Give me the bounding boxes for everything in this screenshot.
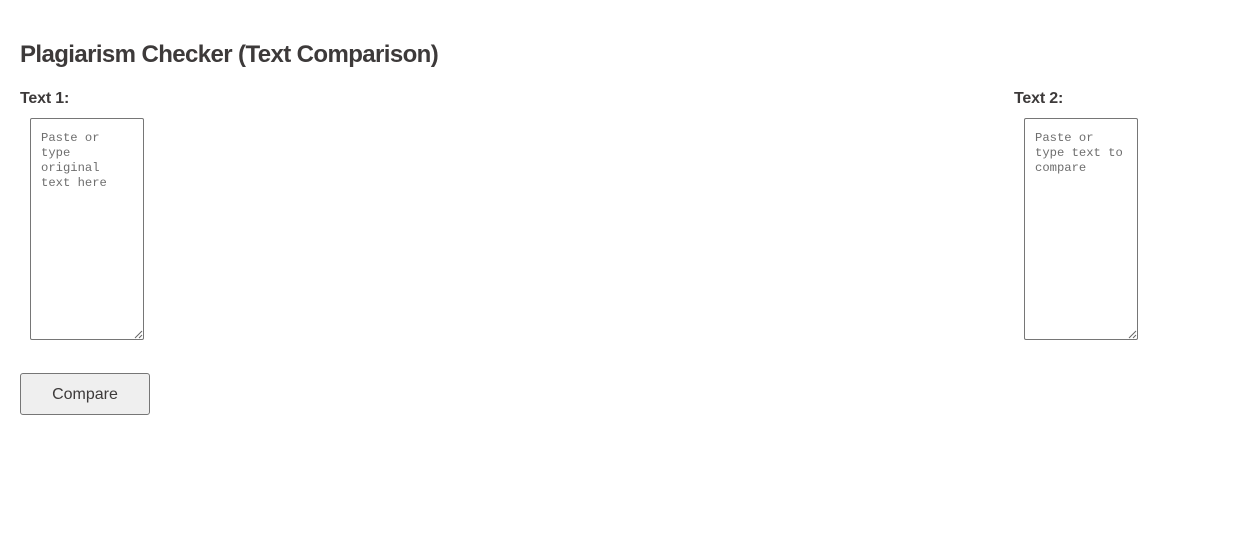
icon: resize grip [1128,330,1136,338]
text area: text 1 [30,118,144,340]
placeholder: text 2: Paste or type text to compare [1035,131,1123,175]
text area: text 2 [1024,118,1138,340]
icon: resize grip [134,330,142,338]
label: text 2: Text 2: [1014,90,1063,107]
title: Plagiarism Checker (Text Comparison) [20,41,438,68]
compare button: Compare [52,386,118,403]
label: text 1: Text 1: [20,90,69,107]
compare button [20,373,150,415]
placeholder: text 1: Paste or type original text here [41,131,107,190]
